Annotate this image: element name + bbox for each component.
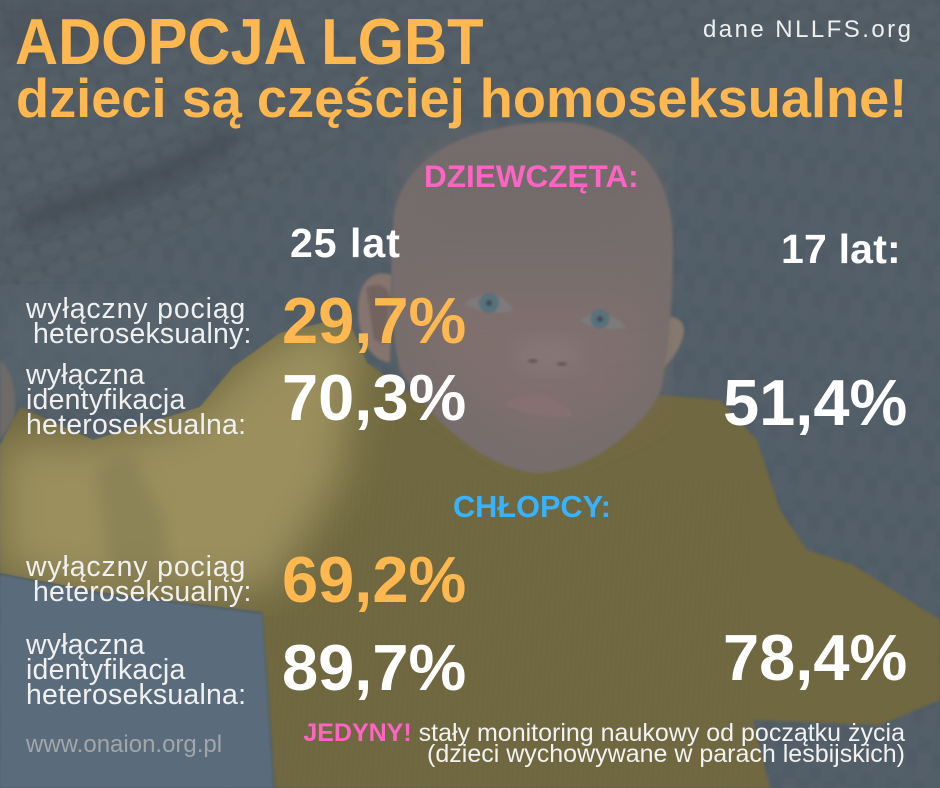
- label: boys exclusive identification: [26, 629, 246, 711]
- footnote: JEDYNY! stały monitoring naukowy od początku życia: [303, 719, 905, 747]
- label: girls exclusive attraction: [26, 293, 252, 350]
- column label: 25 years: 25 lat: [290, 220, 401, 266]
- heading: boys: CHŁOPCY:: [453, 489, 611, 524]
- sweater highlights: [0, 330, 360, 590]
- column label: 17 years: 17 lat:: [781, 226, 901, 272]
- baby nose: [528, 359, 567, 366]
- hand: [0, 360, 15, 440]
- footnote: (dzieci wychowywane w parach lesbijskich): [427, 740, 905, 768]
- footnote: [303, 719, 906, 768]
- label: girls exclusive identification: wyłączna: [26, 359, 145, 391]
- label: girls exclusive attraction: heteroseksualny:: [33, 318, 252, 350]
- label: girls exclusive identification: identyfikacja: [26, 384, 185, 416]
- stat: girls attraction 25: 29,7%: [282, 284, 466, 357]
- label: girls exclusive identification: heteroseksualna:: [26, 409, 246, 441]
- heading: girls: DZIEWCZĘTA:: [424, 158, 639, 194]
- baby ears: [358, 273, 684, 368]
- upper-left blanket fold: [0, 0, 940, 300]
- sweater lower left blanket edge: [0, 575, 273, 788]
- baby head: [391, 122, 673, 473]
- website: www.onaion.org.pl: [26, 731, 222, 758]
- label: boys exclusive attraction: [26, 551, 252, 608]
- stat: girls identification 25: 70,3%: [282, 361, 466, 434]
- subtitle: dzieci są częściej homoseksualne!: [16, 67, 907, 129]
- stat: boys attraction 25: 69,2%: [282, 543, 466, 616]
- stat: girls identification 17: 51,4%: [723, 366, 907, 439]
- baby mouth: [505, 395, 572, 416]
- stat: boys identification 25: 89,7%: [282, 631, 466, 704]
- stat: boys identification 17: 78,4%: [723, 621, 907, 694]
- title: ADOPCJA LGBT: [15, 5, 484, 78]
- label: boys exclusive attraction: heteroseksualny:: [33, 576, 252, 608]
- label: boys exclusive attraction: wyłączny pociąg: [26, 551, 246, 583]
- label: boys exclusive identification: heteroseksualna:: [26, 679, 246, 711]
- label: boys exclusive identification: wyłączna: [26, 629, 145, 661]
- label: girls exclusive identification: [26, 359, 246, 441]
- label: girls exclusive attraction: wyłączny pociąg: [26, 293, 246, 325]
- label: boys exclusive identification: identyfikacja: [26, 654, 185, 686]
- baby eyes: [464, 293, 626, 329]
- sweater: [0, 317, 940, 788]
- source note: dane NLLFS.org: [703, 16, 913, 43]
